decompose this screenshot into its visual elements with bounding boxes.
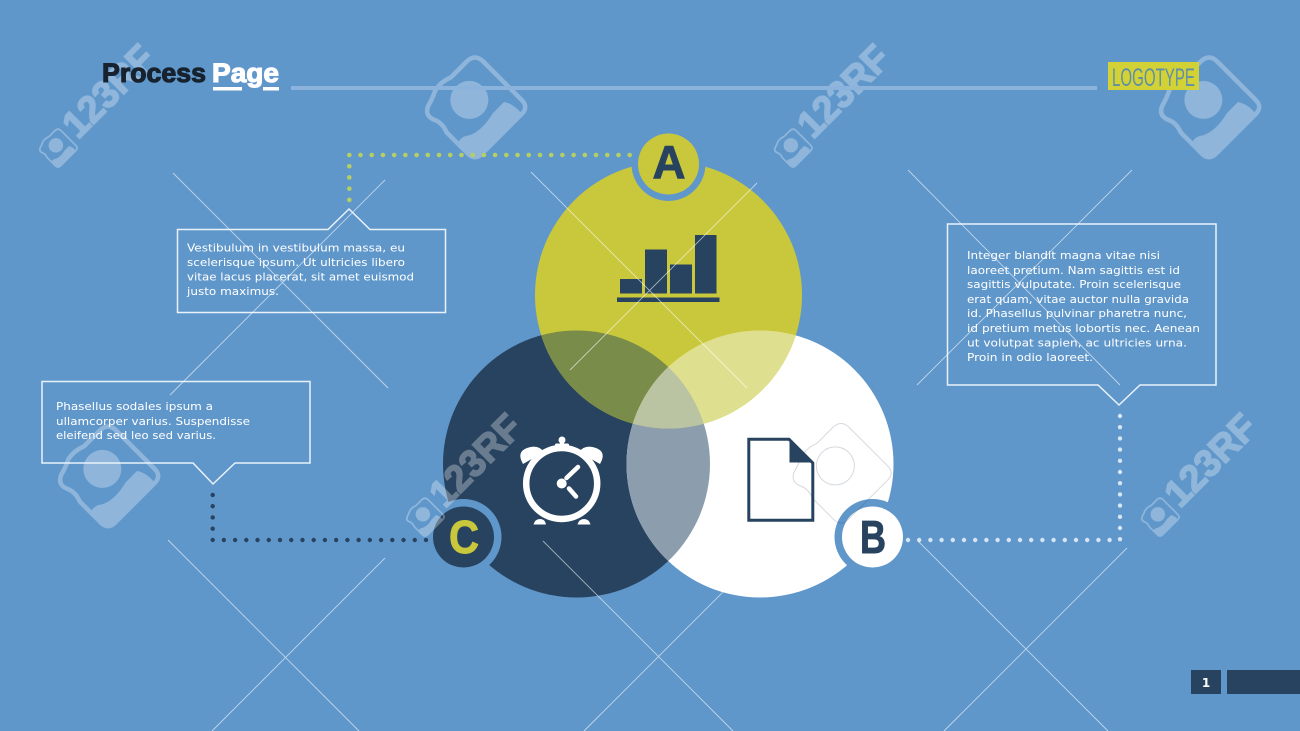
callout B: Proin in odio laoreet. [967, 351, 1093, 364]
callout A: justo maximus. [186, 285, 279, 298]
callout A: Vestibulum in vestibulum massa, eu [187, 242, 405, 254]
badge A: A [652, 136, 686, 188]
callout A [178, 209, 446, 312]
overlap all [632, 367, 704, 428]
overlap A and C [541, 330, 704, 428]
title [102, 58, 279, 90]
callout B: erat quam, vitae auctor nulla gravida [967, 293, 1189, 306]
callout C: ullamcorper varius. Suspendisse [56, 415, 250, 428]
text: 123RF [1157, 406, 1266, 515]
title: Process [102, 58, 206, 88]
badge C: C [449, 511, 479, 563]
connector A [349, 155, 630, 200]
circle B [626, 330, 894, 598]
circle C [443, 330, 710, 598]
callout C: Phasellus sodales ipsum a [56, 400, 213, 413]
badge A [632, 127, 706, 201]
page number: 1 [1202, 676, 1210, 690]
callout B: id. Phasellus pulvinar pharetra nunc, [967, 307, 1187, 320]
callout B: sagittis vulputate. Proin scelerisque [967, 278, 1181, 291]
icon: bar chart [617, 235, 720, 302]
logotype [1108, 62, 1199, 92]
badge B: B [860, 511, 886, 563]
venn diagram [443, 162, 894, 598]
title: Page [212, 58, 279, 88]
text: 123RF [422, 406, 531, 515]
callout B: id pretium metus lobortis nec. Aenean [967, 322, 1200, 335]
circle A [535, 162, 802, 428]
page number [1191, 670, 1300, 694]
overlap A and B [632, 330, 796, 428]
overlap B and C [626, 424, 710, 561]
callout C [42, 382, 310, 484]
callout A: scelerisque ipsum. Ut ultricies libero [187, 256, 405, 269]
badge B [834, 499, 910, 575]
badge C [426, 499, 502, 575]
icon: alarm clock [520, 436, 603, 524]
text: 123RF [55, 37, 164, 146]
connector B [908, 416, 1120, 540]
text: 123RF [790, 37, 899, 146]
callout B: laoreet pretium. Nam sagittis est id [967, 264, 1180, 277]
callout B: ut volutpat sapien, ac ultricies urna. [967, 336, 1187, 350]
logotype: LOGOTYPE [1112, 64, 1195, 92]
callout C: eleifend sed leo sed varius. [56, 429, 216, 442]
callout A: vitae lacus placerat, sit amet euismod [187, 270, 414, 284]
callout B: Integer blandit magna vitae nisi [967, 249, 1160, 262]
callout B [948, 224, 1216, 405]
icon: document [749, 439, 813, 520]
connector C [213, 495, 428, 540]
